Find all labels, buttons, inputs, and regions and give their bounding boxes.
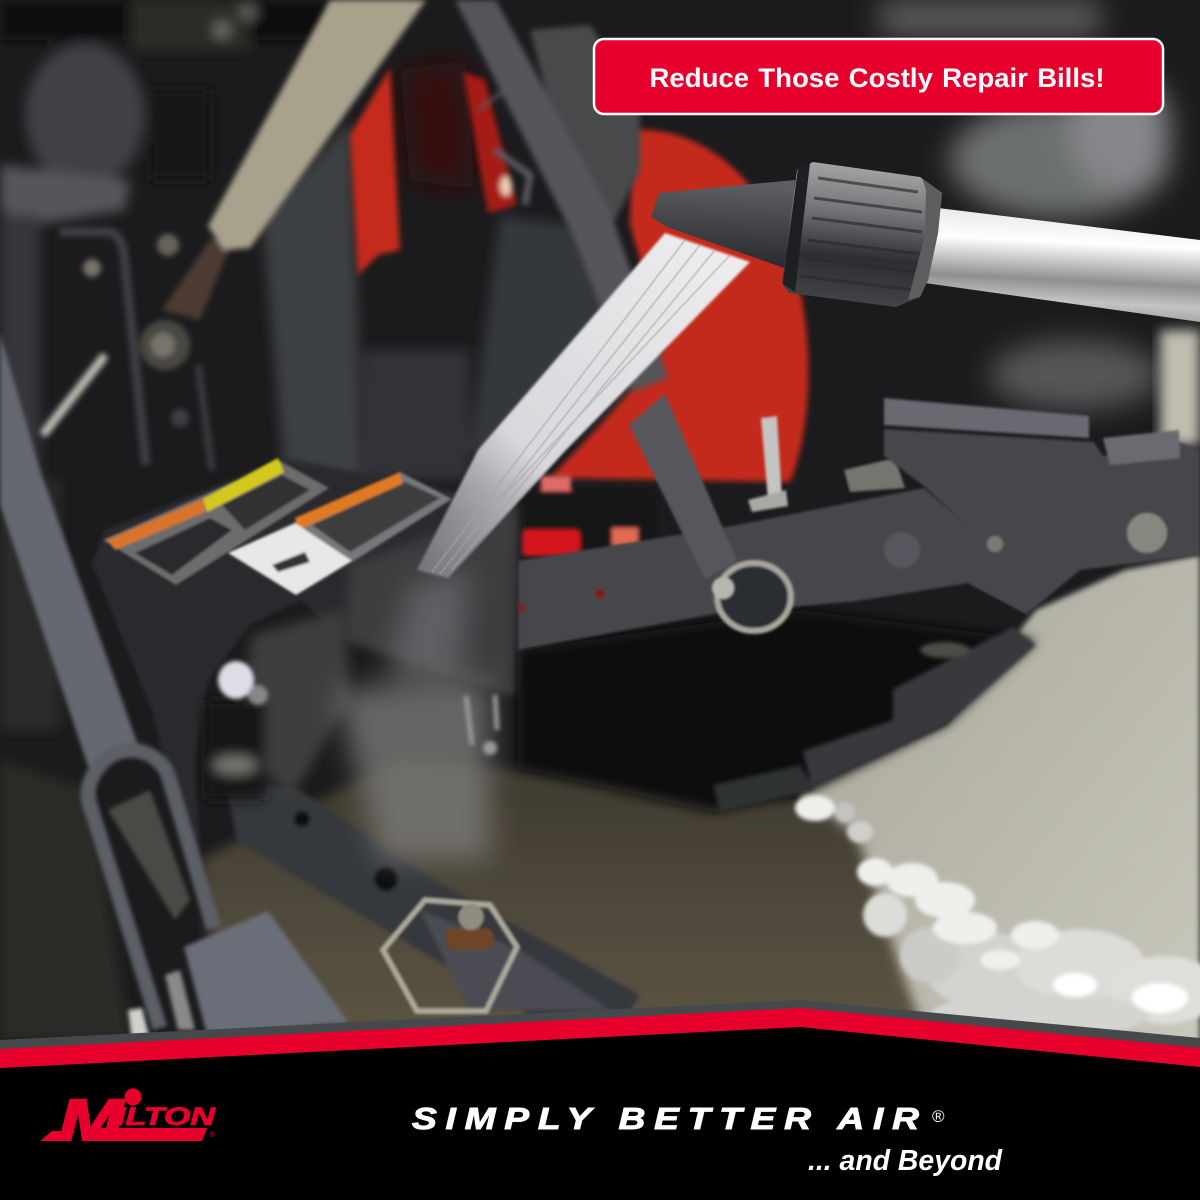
vertical cylinder: [262, 120, 362, 480]
hex nut ring: [383, 900, 517, 1011]
black tread shadow: [518, 610, 1036, 812]
left grey rod and fork: [0, 333, 214, 1028]
curved fender: [92, 458, 517, 860]
tractor drawbar beam: [518, 458, 1027, 650]
tagline: and beyond: ... and Beyond: [808, 1145, 1003, 1177]
lower drawbar with holes: [225, 780, 640, 1015]
callout: repair bills: [594, 39, 1163, 114]
footer band: [0, 1000, 1200, 1200]
ribbed collar: [782, 162, 942, 307]
tagline: simply better air: SIMPLY BETTER AIR: [412, 1102, 919, 1136]
registered mark: ®: [932, 1107, 945, 1126]
splash mist and runoff: [335, 570, 490, 860]
brown puddle: [200, 760, 924, 1030]
grey lift arm: [455, 0, 668, 392]
nozzle water jet: [417, 233, 750, 578]
engine block, upper left: [0, 0, 330, 1040]
red pieces behind beam: [522, 476, 656, 556]
logo: Milton: ®: [209, 1130, 215, 1139]
chrome tube: [925, 208, 1200, 322]
concrete floor: [800, 555, 1200, 1050]
spray nozzle and tube: [651, 162, 1200, 322]
wet floor reflections: [795, 795, 1200, 1037]
logo: Milton: ILTON: [116, 1103, 216, 1131]
engine brackets and bolts: [45, 232, 212, 470]
callout: repair bills: Reduce Those Costly Repair Bills!: [650, 63, 1104, 93]
recess grey mottling under the fan: [360, 215, 650, 480]
right hitch plate: [884, 398, 1200, 614]
white 4W decal: [228, 523, 352, 595]
decal right: [228, 472, 452, 595]
tan rod and brown stub: [162, 0, 426, 320]
dark red fan interior: [400, 60, 475, 190]
cone tip: [651, 180, 795, 270]
steam mist, upper right: [880, 0, 1170, 410]
logo: Milton: [40, 1088, 216, 1153]
fender lower plate: [345, 506, 517, 695]
arch interior: [205, 610, 350, 800]
grey tread block: [713, 627, 1036, 812]
bracket, pin and ring: [629, 394, 791, 631]
decal left: [103, 458, 329, 585]
logo: Milton: M: [59, 1088, 125, 1153]
red fan panels: [350, 68, 808, 482]
water droplets: [218, 661, 497, 755]
tan wall behind right plate: [1160, 330, 1200, 445]
wing plate and stubs: [128, 911, 348, 1040]
